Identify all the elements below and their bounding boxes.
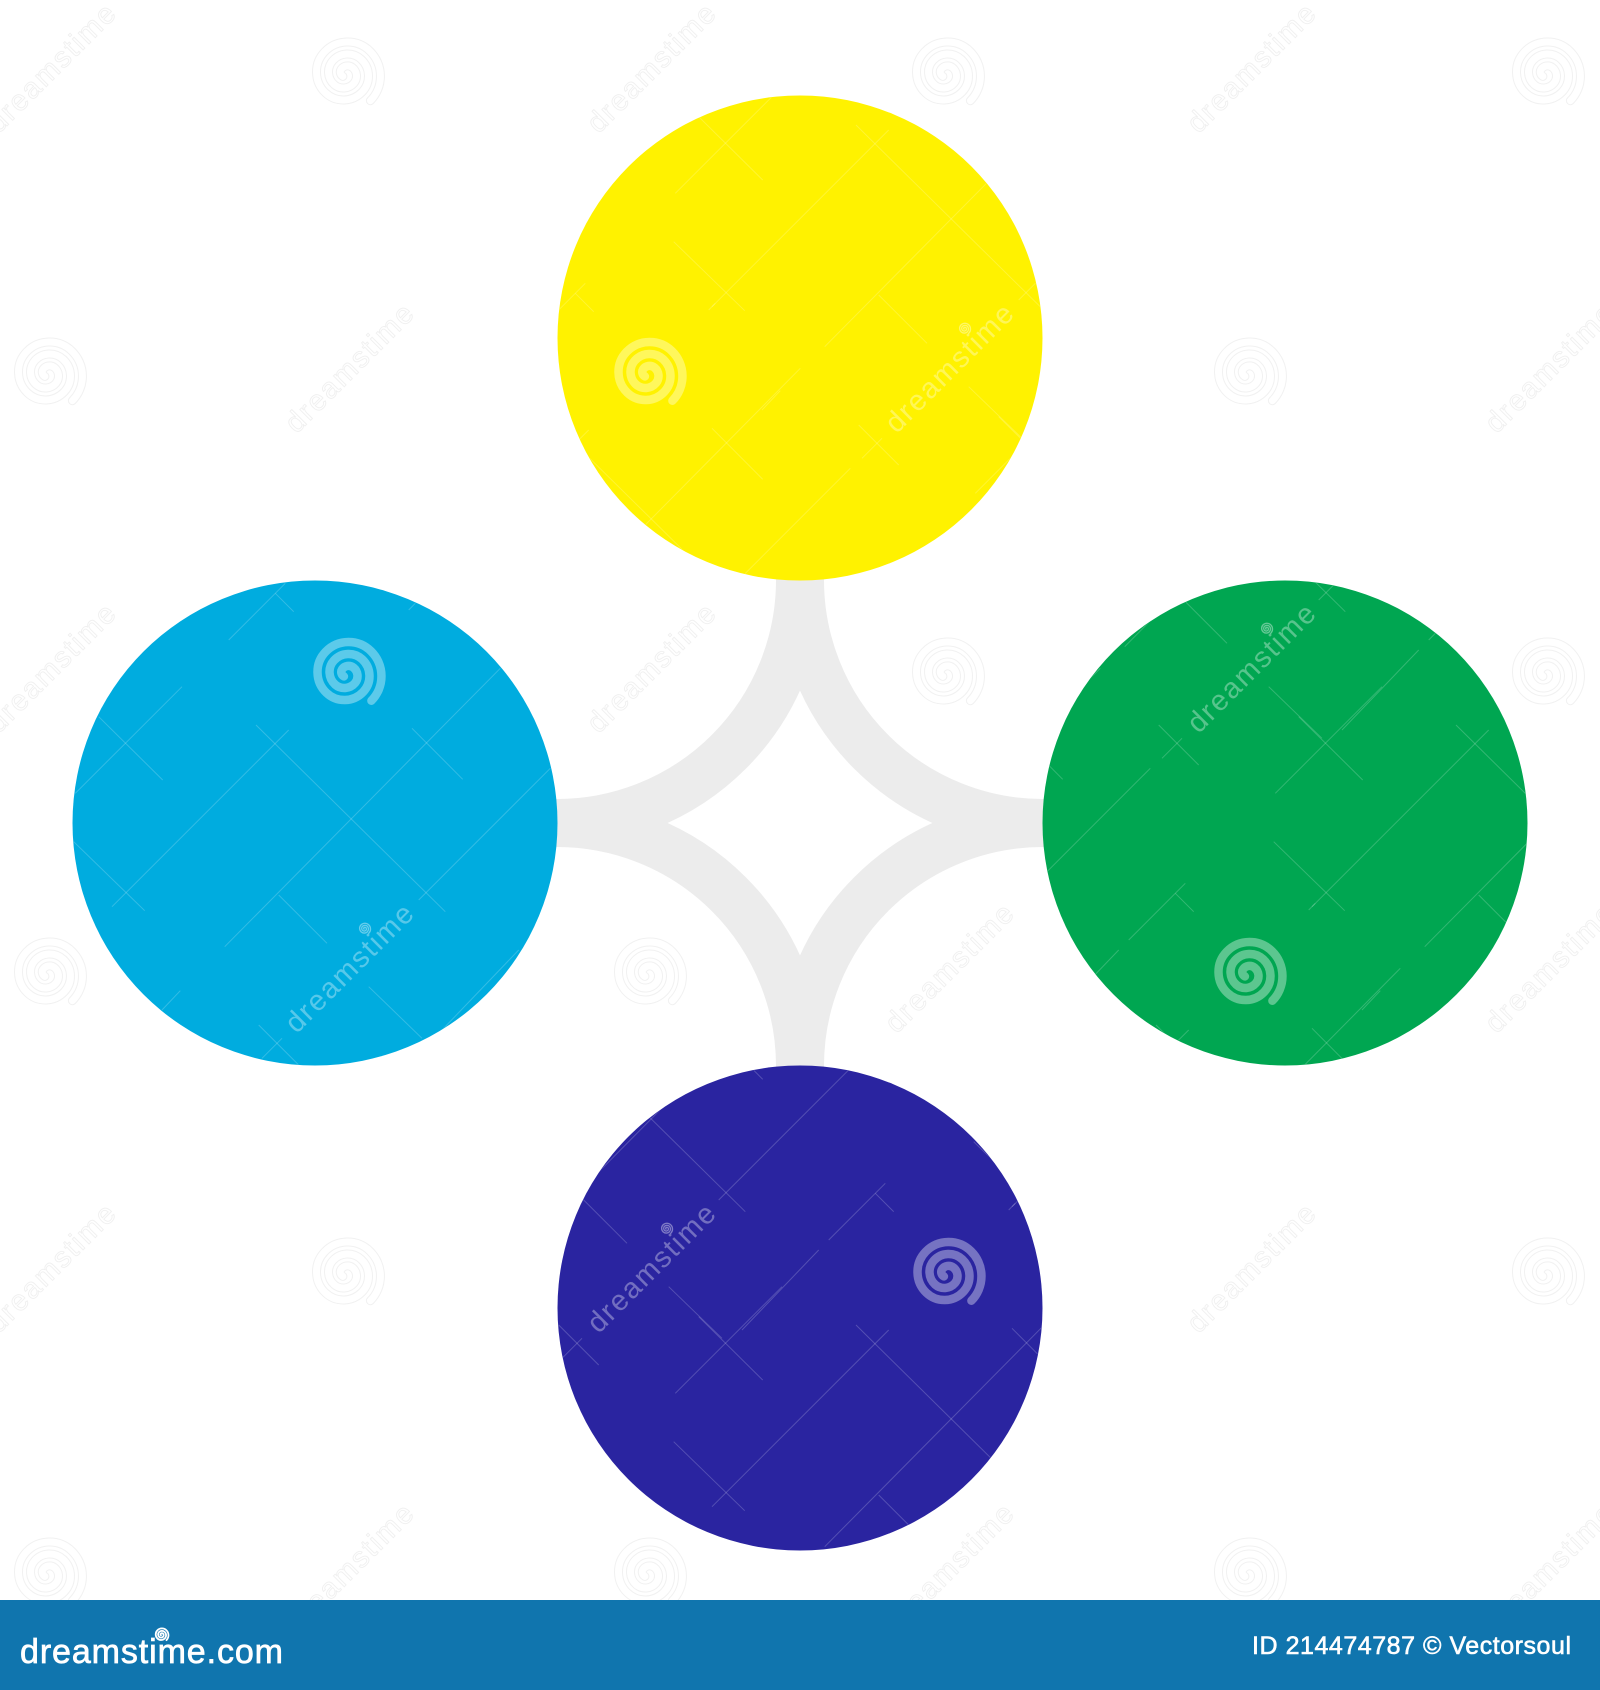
footer credit text: ID 214474787 © Vectorsoul [1252, 1632, 1571, 1660]
arc: bottom to left [551, 823, 800, 1072]
arc: top to left [551, 574, 800, 823]
watermark: text on white: dreamstime [879, 1498, 1020, 1639]
watermark: text on white: dreamstime [1181, 1198, 1322, 1339]
footer bar [0, 1600, 1600, 1690]
circle: yellow top [558, 96, 1042, 580]
watermark spiral on navy [918, 1242, 981, 1301]
footer logo icon: spiral [156, 1628, 168, 1640]
watermark mark on green [1262, 623, 1273, 633]
arc: top to right [800, 574, 1049, 823]
circle: blue left [72, 580, 558, 1066]
watermark text on blue: dreamstime [279, 898, 420, 1039]
watermark: text on white: dreamstime [581, 0, 722, 139]
watermark spiral on green [1219, 942, 1282, 1001]
watermark text on yellow: dreamstime [879, 298, 1020, 439]
watermark: text on white: dreamstime [879, 898, 1020, 1039]
watermark spiral on yellow [619, 342, 682, 401]
watermark: text on white: dreamstime [279, 298, 420, 439]
watermark mark on yellow [960, 323, 971, 333]
footer logo text: dreamstime.com [20, 1633, 283, 1671]
arc: bottom to right [800, 823, 1049, 1072]
watermark spiral on blue [318, 642, 381, 701]
watermark text on green: dreamstime [1181, 598, 1322, 739]
circle: navy bottom [558, 1066, 1042, 1550]
watermark mark on blue [360, 923, 371, 933]
watermark: text on white: dreamstime [279, 1498, 420, 1639]
watermark: text on white: dreamstime [581, 598, 722, 739]
connector arcs: central star [551, 574, 1049, 1072]
watermark text on navy: dreamstime [581, 1198, 722, 1339]
watermark: text on white: dreamstime [1181, 0, 1322, 139]
circle: green right [1042, 580, 1528, 1066]
watermark mark on navy [662, 1223, 673, 1233]
